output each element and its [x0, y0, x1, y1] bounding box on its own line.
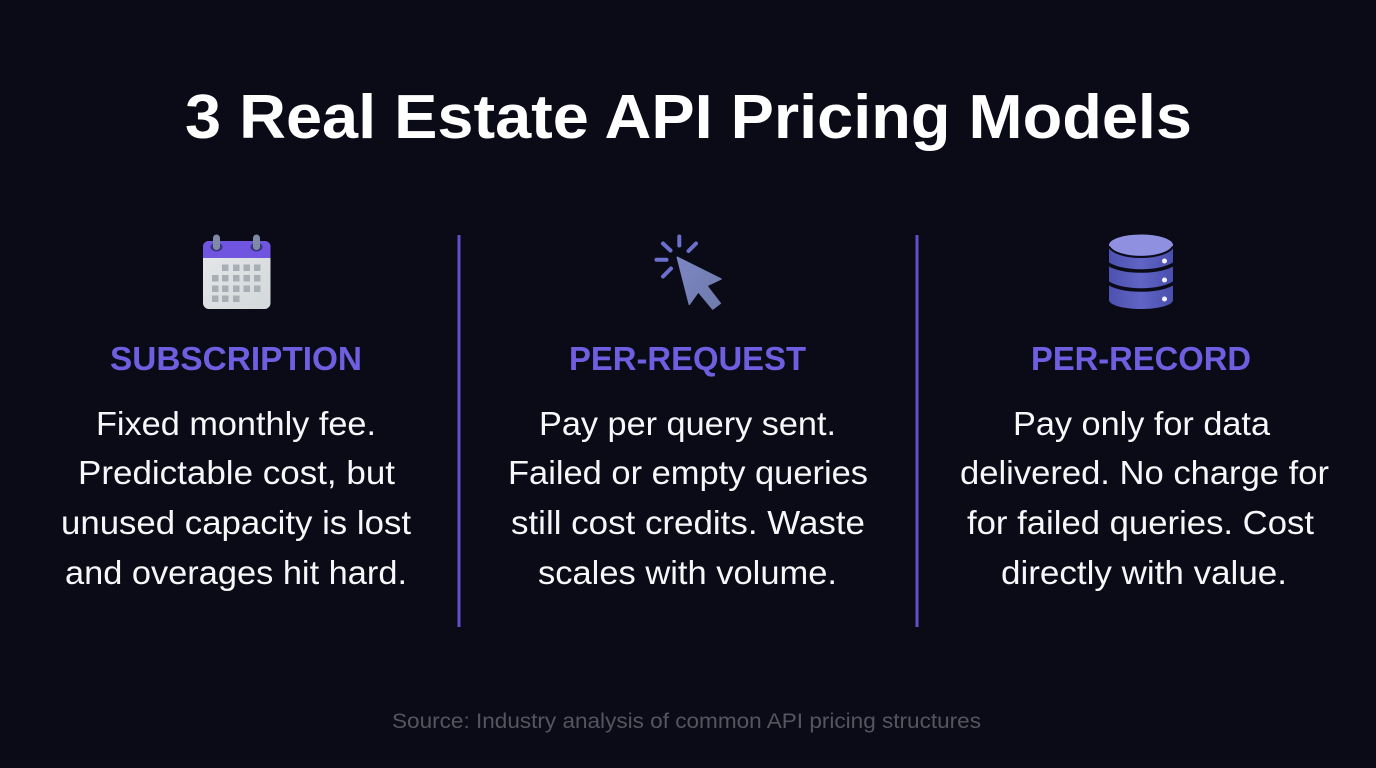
panel: subscription	[61, 234, 411, 591]
icon: database	[1107, 234, 1175, 309]
text block: per-request description: still cost credits. Waste	[511, 504, 865, 541]
text block: subscription description: Predictable cost, but	[78, 454, 395, 491]
icon: calendar	[203, 234, 270, 309]
title: 3 Real Estate API Pricing Models	[185, 83, 1192, 152]
heading: per-request: PER-REQUEST	[569, 340, 806, 377]
text block: subscription description	[61, 405, 411, 591]
text block: per-request description: Pay per query sent.	[539, 405, 836, 442]
text block: per-record description: for failed queries. Cost	[967, 504, 1314, 541]
text block: per-request description: Failed or empty queries	[508, 454, 868, 491]
heading: subscription: SUBSCRIPTION	[110, 340, 362, 377]
heading: per-record: PER-RECORD	[1031, 340, 1251, 377]
divider right	[916, 235, 918, 627]
text block: per-record description	[960, 405, 1329, 591]
text block: subscription description: Fixed monthly fee.	[96, 405, 376, 442]
text block: per-record description: Pay only for data	[1013, 405, 1271, 442]
divider left	[458, 235, 460, 627]
text block: per-record description: directly with value.	[1001, 554, 1287, 591]
text block: subscription description: and overages hit hard.	[65, 554, 407, 591]
icon: cursor click	[656, 236, 721, 309]
text block: per-request description: scales with volume.	[538, 554, 837, 591]
text block: per-request description	[508, 405, 868, 591]
source note: Source: Industry analysis of common API pricing structures	[392, 710, 981, 733]
text block: per-record description: delivered. No charge for	[960, 454, 1329, 491]
text block: subscription description: unused capacity is lost	[61, 504, 411, 541]
panel: per-request	[508, 236, 868, 591]
panel: per-record	[960, 234, 1329, 591]
